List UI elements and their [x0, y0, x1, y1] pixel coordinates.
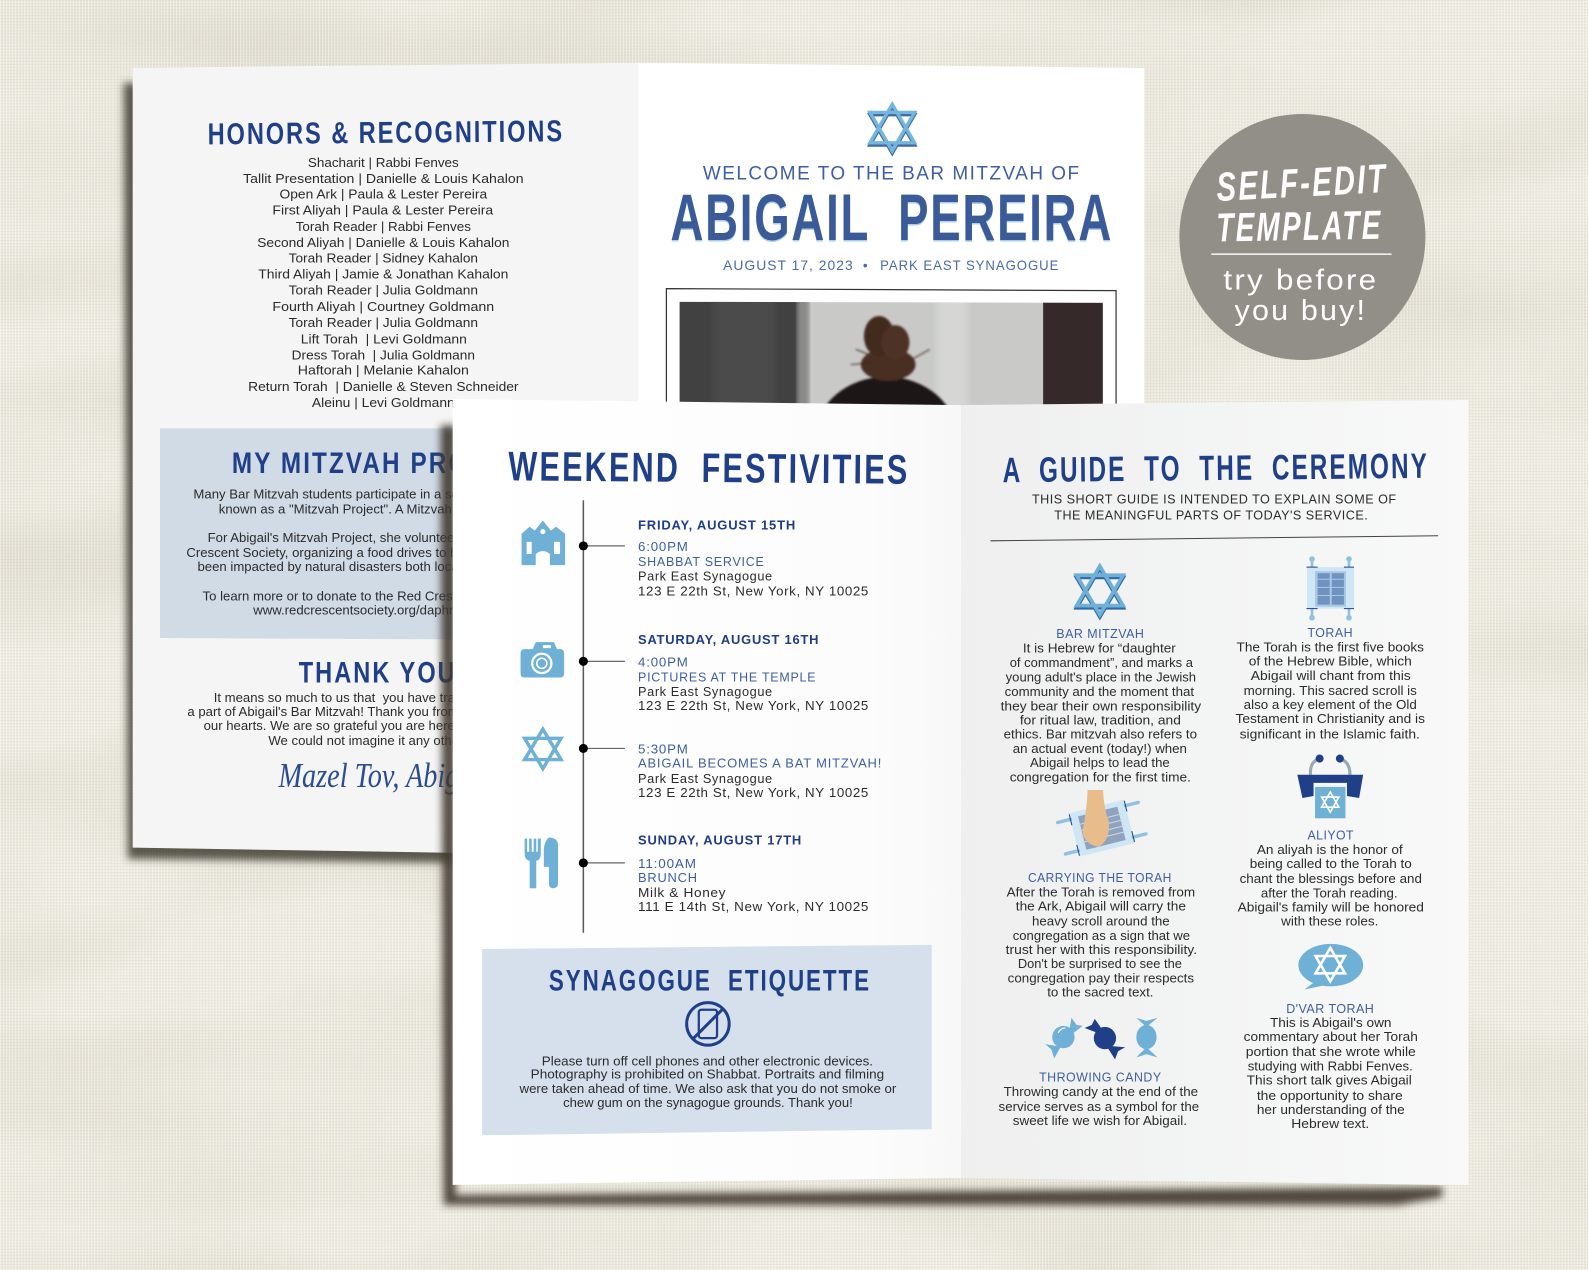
text block: etiquette rules: Photography is prohibited on Shabbat. Portraits and filming [531, 1067, 884, 1082]
section: bar mitzvah: BAR MITZVAH [1056, 626, 1144, 641]
section: torah: morning. This sacred scroll is [1244, 683, 1417, 698]
section: aliyot: after the Torah reading. [1261, 885, 1398, 900]
text block: etiquette rules: were taken ahead of time. We also ask that you do not smoke or [519, 1081, 897, 1096]
name title [670, 180, 1113, 256]
section: aliyot: chant the blessings before and [1240, 871, 1422, 886]
panel: my mitzvah project [160, 428, 608, 640]
schedule: saturday service: ABIGAIL BECOMES A BAT MITZVAH! [638, 756, 882, 771]
section: d'var torah: studying with Rabbi Fenves. [1248, 1058, 1413, 1073]
section: torah: Testament in Christianity and is [1236, 711, 1425, 726]
name title: ABIGAIL PEREIRA [670, 182, 1113, 256]
icon: torah scroll [1306, 556, 1354, 621]
section: bar mitzvah: an actual event (today!) when [1013, 741, 1187, 756]
schedule: saturday pictures: Park East Synagogue [638, 684, 773, 699]
text block: honors list: Torah Reader | Rabbi Fenves [296, 219, 471, 234]
schedule: friday: Park East Synagogue [638, 568, 773, 583]
schedule: friday: FRIDAY, AUGUST 15TH [638, 518, 796, 533]
photo frame [666, 288, 1117, 426]
section: aliyot: with these roles. [1280, 914, 1378, 929]
badge heading [1215, 155, 1389, 251]
text block: mitzvah project description: To learn more or to donate to the Red Crescent [203, 589, 478, 604]
text block: mitzvah project description: Crescent Society, organizing a food drives to help [186, 545, 475, 560]
panel: synagogue etiquette [482, 945, 932, 1135]
icon: bimah podium [1297, 755, 1363, 818]
badge subtext: you buy! [1235, 295, 1367, 327]
section: d'var torah: This is Abigail's own [1270, 1015, 1392, 1030]
heading: thank you: THANK YOU [299, 657, 457, 690]
text block: honors list: Torah Reader | Julia Goldmann [289, 283, 478, 298]
text block: mitzvah project description: For Abigail's Mitzvah Project, she volunteered [208, 530, 473, 545]
section: torah: also a key element of the Old [1244, 697, 1417, 712]
date and venue: AUGUST 17, 2023 [723, 258, 854, 273]
icon: fork and knife [525, 838, 558, 888]
section: aliyot: ALIYOT [1307, 828, 1354, 843]
text block: honors list: Third Aliyah | Jamie & Jonathan Kahalon [258, 267, 508, 282]
schedule: sunday: BRUNCH [638, 870, 698, 885]
section: throwing candy: THROWING CANDY [1039, 1070, 1162, 1085]
section: carrying the torah: congregation pay their respects [1008, 970, 1194, 985]
schedule: saturday pictures [638, 632, 869, 713]
schedule: saturday pictures: PICTURES AT THE TEMPLE [638, 670, 816, 685]
badge heading: TEMPLATE [1216, 202, 1383, 251]
schedule: sunday: SUNDAY, AUGUST 17TH [638, 833, 802, 848]
section: d'var torah: her understanding of the [1257, 1102, 1405, 1117]
text block: thank you message: We could not imagine it any other way [268, 733, 491, 748]
icon: hand carrying torah [1056, 790, 1148, 860]
icon: candies [1045, 1018, 1158, 1059]
section: bar mitzvah: community and the moment that [1005, 684, 1194, 699]
panel: back sheet left page [133, 63, 638, 856]
section: torah [1236, 556, 1425, 741]
icon: star of david [1077, 566, 1123, 617]
badge subtext [1223, 265, 1378, 327]
section: aliyot: An aliyah is the honor of [1257, 842, 1403, 857]
text block: thank you message: It means so much to us that you have traveled to be [214, 690, 519, 705]
text block: etiquette rules: Please turn off cell phones and other electronic devices. [542, 1053, 873, 1068]
badge heading: SELF-EDIT [1215, 155, 1389, 210]
section: throwing candy: sweet life we wish for Abigail. [1013, 1113, 1187, 1128]
front sheet shadow [441, 425, 1442, 1205]
section: torah: The Torah is the first five books [1237, 640, 1424, 655]
timeline [579, 500, 625, 933]
signature: Mazel Tov, Abigail [278, 757, 489, 795]
name title: ABIGAIL PEREIRA [670, 180, 1113, 254]
panel: back sheet [133, 63, 1468, 1205]
section: carrying the torah: to the sacred text. [1047, 985, 1154, 1000]
heading: synagogue etiquette: SYNAGOGUE ETIQUETTE [549, 964, 871, 997]
schedule: sunday: 11:00AM [638, 856, 697, 871]
icon: speech bubble with star [1298, 944, 1363, 989]
welcome line: WELCOME TO THE BAR MITZVAH OF [703, 163, 1081, 184]
text block: mitzvah project description: been impacted by natural disasters both locally [197, 559, 471, 574]
icon: star of david header [870, 104, 915, 153]
section: bar mitzvah: they bear their own responsibility [1001, 698, 1202, 713]
panel: front sheet right page [961, 400, 1468, 1185]
text block: honors list: Lift Torah | Levi Goldmann [301, 331, 467, 346]
text block: honors list: Torah Reader | Sidney Kahalon [289, 250, 478, 265]
text block: honors list [243, 155, 524, 410]
section: carrying the torah: trust her with this responsibility. [1006, 942, 1197, 957]
section: throwing candy: service serves as a symbol for the [999, 1099, 1199, 1114]
section: throwing candy [999, 1018, 1199, 1128]
schedule: friday: 6:00PM [638, 539, 689, 554]
schedule: friday [638, 518, 869, 599]
section: carrying the torah: the Ark, Abigail will carry the [1016, 898, 1186, 913]
text block: honors list: Dress Torah | Julia Goldmann [292, 348, 475, 363]
section: d'var torah [1244, 944, 1418, 1131]
section: aliyot [1238, 755, 1424, 929]
text block: honors list: Torah Reader | Julia Goldmann [289, 315, 478, 330]
section: d'var torah: portion that she wrote while [1246, 1044, 1416, 1059]
section: bar mitzvah: young adult's place in the Jewish [1006, 670, 1196, 685]
section: bar mitzvah: for ritual law, tradition, and [1020, 713, 1181, 728]
badge subtext: try before [1223, 265, 1378, 297]
schedule: saturday pictures: 4:00PM [638, 654, 689, 669]
schedule: sunday: Milk & Honey [638, 885, 726, 900]
guide intro: THIS SHORT GUIDE IS INTENDED TO EXPLAIN SOME OF [1032, 491, 1397, 506]
text block: honors list: Tallit Presentation | Danielle & Louis Kahalon [243, 171, 524, 186]
section: torah: TORAH [1307, 625, 1353, 640]
icon: camera [521, 642, 564, 678]
text block: mitzvah project description [186, 486, 530, 618]
text block: honors list: Aleinu | Levi Goldmann [312, 395, 455, 410]
section: aliyot: being called to the Torah to [1250, 856, 1412, 871]
date and venue: • [863, 258, 868, 273]
text block: thank you message: a part of Abigail's Bar Mitzvah! Thank you from the bottom [187, 704, 525, 719]
section: d'var torah: This short talk gives Abigail [1247, 1073, 1412, 1088]
schedule: saturday service: Park East Synagogue [638, 771, 773, 786]
text block: mitzvah project description: known as a "Mitzvah Project". A Mitzvah Project [219, 501, 497, 516]
icon: star of david [525, 729, 561, 769]
schedule: saturday service: 123 E 22th St, New York, NY 10025 [638, 785, 869, 800]
section: bar mitzvah: of commandment”, and marks a [1010, 655, 1194, 670]
icon: synagogue [522, 521, 565, 565]
section: torah: of the Hebrew Bible, which [1249, 653, 1412, 668]
text block: honors list: Second Aliyah | Danielle & Louis Kahalon [257, 235, 509, 250]
section: bar mitzvah: Abigail helps to lead the [1030, 755, 1170, 770]
text block: thank you message [187, 690, 525, 748]
schedule: sunday [638, 833, 869, 914]
section: d'var torah: the opportunity to share [1257, 1088, 1403, 1103]
heading: honors and recognitions: HONORS & RECOGNITIONS [207, 114, 564, 151]
panel: front sheet [453, 399, 1468, 1185]
schedule: saturday service [638, 741, 882, 800]
schedule: saturday pictures: 123 E 22th St, New York, NY 10025 [638, 698, 869, 713]
text block: honors list: Return Torah | Danielle & Steven Schneider [248, 379, 519, 394]
schedule: sunday: 111 E 14th St, New York, NY 10025 [638, 899, 869, 914]
guide intro: THE MEANINGFUL PARTS OF TODAY'S SERVICE. [1054, 508, 1368, 523]
section: torah: Abigail will chant from this [1251, 668, 1411, 683]
section: d'var torah: commentary about her Torah [1244, 1029, 1418, 1044]
section: d'var torah: Hebrew text. [1291, 1116, 1369, 1131]
section: carrying the torah: Don't be surprised to see the [1018, 956, 1182, 971]
section: bar mitzvah: congregation for the first time. [1010, 769, 1191, 784]
badge: self-edit template [1179, 114, 1425, 360]
section: carrying the torah: congregation as a sign that we [1013, 928, 1190, 943]
text block: honors list: Fourth Aliyah | Courtney Goldmann [272, 299, 494, 314]
section: throwing candy: Throwing candy at the end of the [1004, 1084, 1198, 1099]
text block: mitzvah project description: Many Bar Mitzvah students participate in a service project [193, 486, 530, 501]
text block: etiquette rules [519, 1053, 897, 1110]
text block: honors list: First Aliyah | Paula & Lester Pereira [272, 203, 494, 218]
schedule: saturday pictures: SATURDAY, AUGUST 16TH [638, 632, 819, 647]
text block: honors list: Haftorah | Melanie Kahalon [298, 363, 469, 378]
section: bar mitzvah: It is Hebrew for “daughter [1023, 641, 1176, 656]
text block: thank you message: our hearts. We are so grateful you are here [204, 718, 455, 733]
date and venue: PARK EAST SYNAGOGUE [880, 258, 1059, 273]
section: d'var torah: D'VAR TORAH [1286, 1001, 1374, 1016]
heading: weekend festivities: WEEKEND FESTIVITIES [508, 442, 910, 493]
schedule: friday: SHABBAT SERVICE [638, 554, 765, 569]
section: carrying the torah [1006, 790, 1197, 1000]
date and venue [723, 258, 1059, 273]
guide intro [1032, 491, 1397, 523]
heading: my mitzvah project: MY MITZVAH PROJECT [232, 447, 540, 480]
text block: honors list: Shacharit | Rabbi Fenves [308, 155, 459, 170]
photo [680, 302, 1103, 426]
back sheet shadow [124, 83, 453, 863]
section: torah: significant in the Islamic faith. [1240, 726, 1420, 741]
text block: honors list: Open Ark | Paula & Lester Pereira [280, 187, 488, 202]
panel: back sheet right page [638, 63, 1144, 425]
text block: mitzvah project description: www.redcrescentsociety.org/daphne [252, 603, 464, 618]
schedule: saturday service: 5:30PM [638, 741, 689, 756]
section: carrying the torah: heavy scroll around the [1032, 914, 1170, 929]
section: aliyot: Abigail's family will be honored [1238, 899, 1424, 914]
text block: etiquette rules: chew gum on the synagogue grounds. Thank you! [563, 1095, 853, 1110]
section: carrying the torah: After the Torah is removed from [1007, 884, 1195, 899]
icon: no phones [687, 1003, 729, 1045]
section: bar mitzvah [1001, 566, 1202, 784]
schedule: friday: 123 E 22th St, New York, NY 10025 [638, 584, 869, 599]
section: carrying the torah: CARRYING THE TORAH [1028, 870, 1172, 885]
section: bar mitzvah: ethics. Bar mitzvah also refers to [1004, 726, 1197, 741]
panel: front sheet left page [453, 399, 961, 1185]
